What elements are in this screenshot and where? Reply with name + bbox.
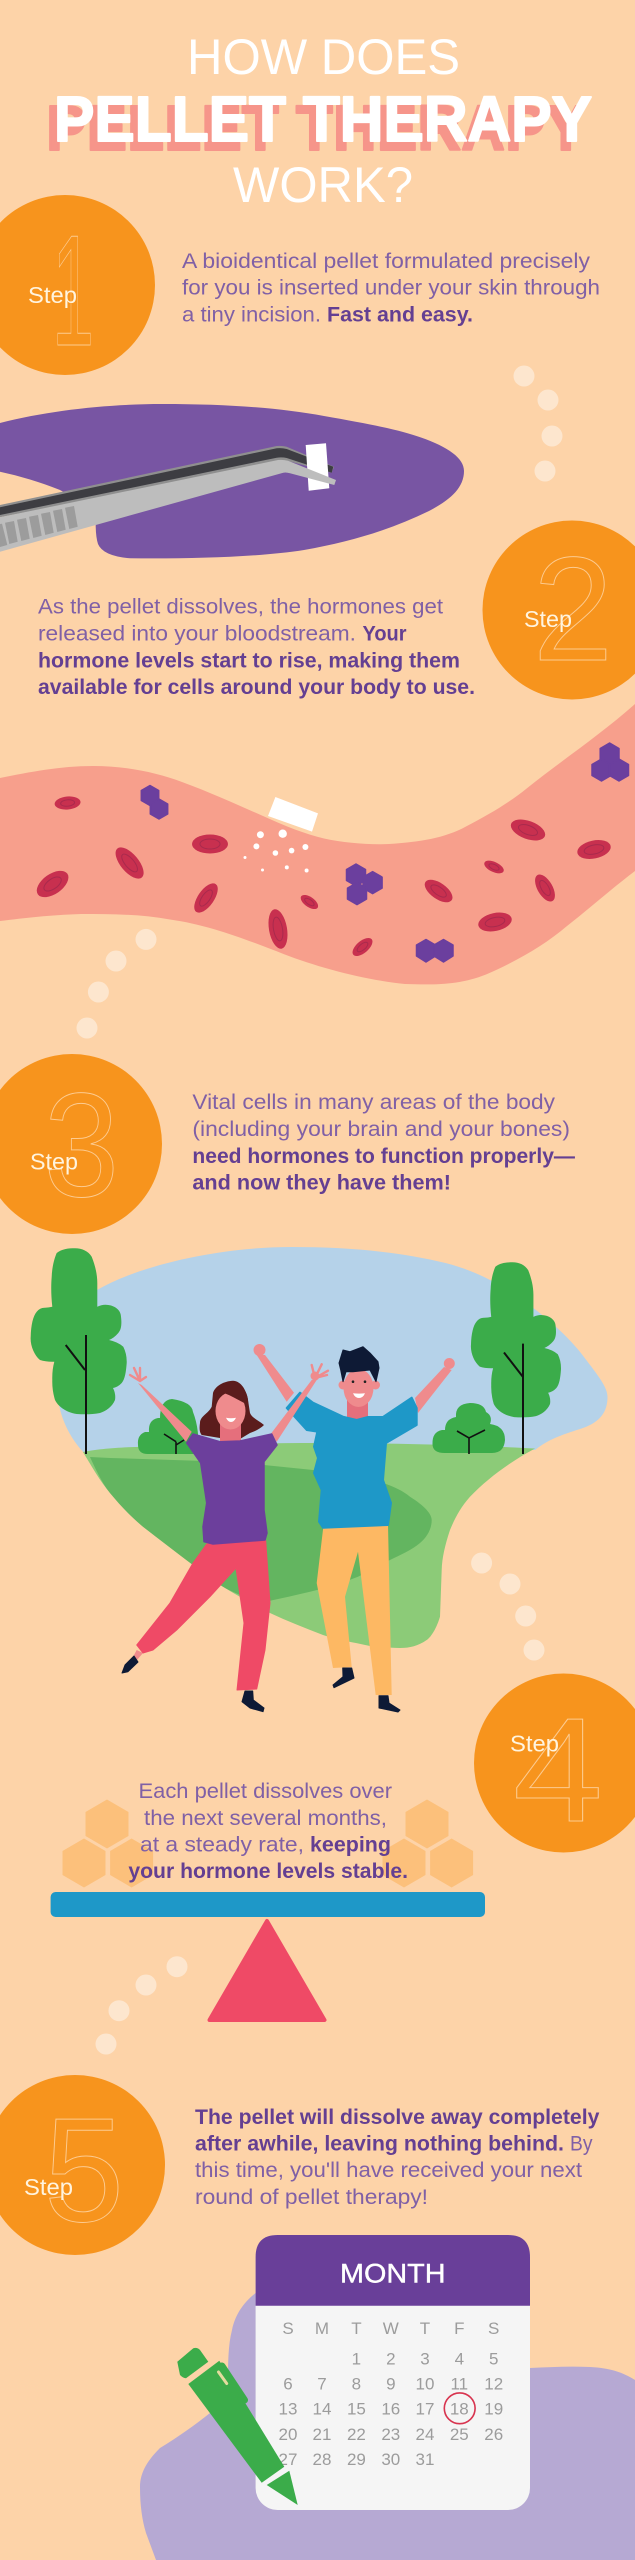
step 5 text: round of pellet therapy! xyxy=(195,2186,428,2209)
step 4 badge: 4 xyxy=(513,1688,603,1853)
blood vessel xyxy=(0,704,635,984)
step 2 badge: 2 xyxy=(533,527,613,692)
date grid: 1 xyxy=(352,2350,361,2369)
step 2 text: Your xyxy=(362,622,406,646)
date grid: 17 xyxy=(416,2400,434,2419)
step 4 text: Each pellet dissolves over xyxy=(138,1780,392,1803)
man xyxy=(254,1344,455,1712)
step 2 text: As the pellet dissolves, the hormones get xyxy=(38,596,443,619)
date grid: 16 xyxy=(381,2400,400,2419)
step 3 text: need hormones to function properly— xyxy=(192,1145,575,1168)
title: PELLET THERAPY xyxy=(46,92,586,164)
step 1 text: a tiny incision. xyxy=(182,303,321,326)
tree right xyxy=(471,1262,561,1454)
date grid: 10 xyxy=(416,2374,434,2393)
park scene xyxy=(31,1247,607,1712)
weekday row: W xyxy=(383,2319,399,2338)
date grid: 31 xyxy=(416,2450,434,2469)
tweezers and pellet xyxy=(0,443,336,552)
dotted path 2 xyxy=(76,929,156,1038)
hexagon stacks xyxy=(62,1800,473,1888)
step 3 text: Vital cells in many areas of the body xyxy=(192,1091,556,1114)
step 1 text xyxy=(182,250,600,326)
calendar header xyxy=(256,2235,530,2306)
lavender blob xyxy=(140,2293,635,2560)
dotted path 4 xyxy=(96,1956,188,2054)
step 3 text: and now they have them! xyxy=(192,1172,451,1194)
date grid: 25 xyxy=(450,2425,469,2444)
step 5 badge: Step xyxy=(24,2174,73,2200)
step 4 text: at a steady rate, xyxy=(140,1834,304,1857)
month label: MONTH xyxy=(340,2259,446,2289)
date grid: 27 xyxy=(279,2450,297,2469)
dotted path 3 xyxy=(471,1552,544,1660)
date grid: 3 xyxy=(420,2350,430,2369)
tree left xyxy=(31,1248,127,1454)
pen xyxy=(177,2348,298,2505)
weekday row: S xyxy=(488,2319,499,2338)
date grid: 4 xyxy=(455,2350,464,2369)
step 3 badge: Step xyxy=(30,1148,78,1174)
step 1 badge xyxy=(0,195,155,379)
calendar xyxy=(256,2235,530,2510)
step 3 text: (including your brain and your bones) xyxy=(192,1118,570,1141)
date grid: 7 xyxy=(317,2374,327,2393)
date grid: 22 xyxy=(347,2425,366,2444)
balance beam xyxy=(51,1892,485,1917)
bush right xyxy=(432,1403,505,1454)
date grid: 23 xyxy=(381,2425,400,2444)
dotted path 1 xyxy=(514,366,562,482)
date grid: 15 xyxy=(347,2400,366,2419)
date grid: 21 xyxy=(313,2425,331,2444)
date grid: 9 xyxy=(386,2374,396,2393)
step 5 text: after awhile, leaving nothing behind. xyxy=(195,2133,564,2156)
step 4 text xyxy=(128,1780,408,1883)
date grid: 30 xyxy=(381,2450,400,2469)
purple blob xyxy=(0,404,464,558)
date grid: 2 xyxy=(386,2350,396,2369)
step 5 badge xyxy=(0,2075,165,2255)
weekday row: F xyxy=(454,2319,464,2338)
step 3 text xyxy=(192,1091,575,1194)
date grid: 20 xyxy=(279,2425,297,2444)
step 3 badge: 3 xyxy=(44,1063,119,1228)
date grid: 6 xyxy=(283,2374,293,2393)
step 1 badge: Step xyxy=(28,282,77,308)
date grid: 12 xyxy=(484,2374,503,2393)
highlighted date circle xyxy=(444,2393,475,2424)
date grid: 26 xyxy=(484,2425,503,2444)
hormone molecules xyxy=(141,743,629,962)
step 2 text: released into your bloodstream. xyxy=(38,622,356,646)
step 5 text: By xyxy=(570,2133,593,2156)
bush left xyxy=(138,1399,198,1454)
date grid: 24 xyxy=(416,2425,434,2444)
title xyxy=(46,29,592,213)
step 2 text xyxy=(38,596,475,699)
weekday row: T xyxy=(351,2319,362,2338)
date grid: 19 xyxy=(484,2400,503,2419)
date grid xyxy=(279,2350,503,2469)
step 4 text: your hormone levels stable. xyxy=(128,1860,408,1883)
date grid: 11 xyxy=(450,2374,468,2393)
step 2 text: available for cells around your body to use. xyxy=(38,676,475,699)
sky xyxy=(55,1247,608,1452)
date grid: 28 xyxy=(313,2450,331,2469)
step 1 text: Fast and easy. xyxy=(327,303,473,326)
step 4 text: keeping xyxy=(310,1834,391,1857)
red blood cells xyxy=(32,795,612,959)
weekday row: M xyxy=(315,2319,329,2338)
step 4 badge: Step xyxy=(510,1731,559,1757)
step 2 text: hormone levels start to rise, making them xyxy=(38,649,460,672)
woman xyxy=(122,1364,328,1712)
date grid: 5 xyxy=(489,2350,498,2369)
step 4 badge xyxy=(474,1674,635,1853)
weekday row xyxy=(282,2319,499,2338)
date grid: 13 xyxy=(279,2400,297,2419)
title: HOW DOES xyxy=(187,29,460,85)
step 4 text: the next several months, xyxy=(144,1807,387,1830)
step 3 badge xyxy=(0,1054,162,1234)
step 1 text: for you is inserted under your skin through xyxy=(182,277,600,300)
step 1 text: A bioidentical pellet formulated precisely xyxy=(182,250,591,273)
step 2 badge: Step xyxy=(524,606,572,632)
weekday row: T xyxy=(420,2319,430,2338)
title: WORK? xyxy=(233,157,413,213)
step 2 badge xyxy=(482,520,635,700)
dissolving pellet with particles xyxy=(244,797,318,872)
date grid: 14 xyxy=(313,2400,331,2419)
calendar body xyxy=(256,2235,530,2510)
step 5 text: this time, you'll have received your next xyxy=(195,2159,582,2182)
step 5 badge: 5 xyxy=(44,2088,124,2253)
date grid: 18 xyxy=(450,2400,469,2419)
weekday row: S xyxy=(282,2319,294,2338)
step 1 badge: 1 xyxy=(52,203,94,379)
hill xyxy=(90,1457,432,1601)
step 5 text xyxy=(195,2106,600,2209)
step 5 text: The pellet will dissolve away completely xyxy=(195,2106,600,2129)
title: PELLET THERAPY xyxy=(54,83,592,155)
balance fulcrum xyxy=(210,1921,324,2020)
date grid: 8 xyxy=(352,2374,361,2393)
ground xyxy=(83,1443,535,1648)
date grid: 29 xyxy=(347,2450,366,2469)
